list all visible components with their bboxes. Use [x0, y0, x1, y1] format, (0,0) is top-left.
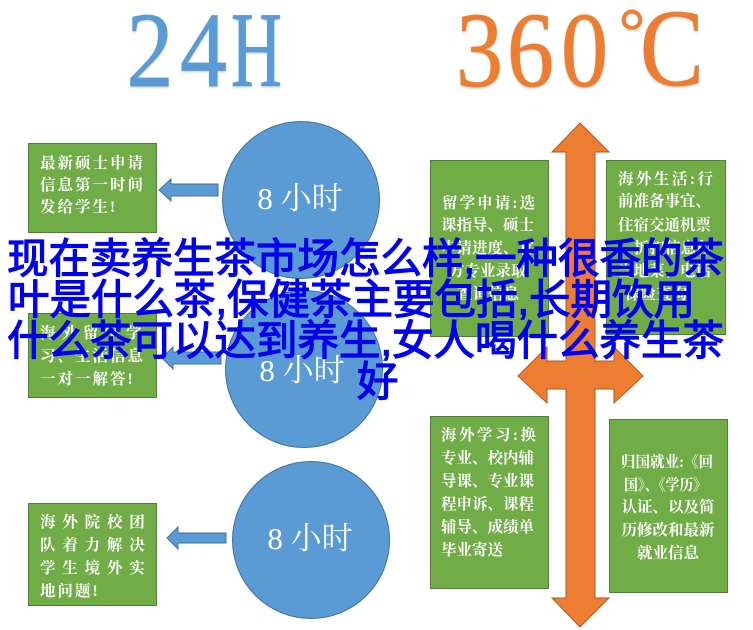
panel: top-left green box: 最新硕士申请: [40, 153, 145, 172]
circle: second 8 hours: 8 小时: [259, 353, 345, 388]
panel: middle-left green box: [28, 314, 156, 398]
panel: study application box: 课指导、硕士: [441, 215, 534, 234]
panel: overseas study box: [430, 416, 548, 588]
icon: arrow from middle circle: [162, 347, 221, 369]
panel: bottom-left green box: 地问题!: [40, 581, 100, 600]
circle: first 8 hours: 8 小时: [257, 181, 343, 216]
panel: overseas study box: 程申诉、课程: [441, 494, 535, 513]
panel: return employment box: 历修改和最新: [621, 521, 715, 539]
panel: study application box: [430, 160, 548, 336]
panel: study application box: 留学申请:选: [442, 193, 535, 212]
panel: bottom-left green box: 海外院校团: [40, 512, 152, 531]
panel: top-left green box: 发给学生!: [40, 197, 117, 216]
heading: 24H: [126, 0, 282, 110]
panel: middle-left green box: 海外留学学: [40, 323, 148, 342]
panel: overseas study box: 海外学习:换: [441, 425, 536, 444]
panel: overseas life box: [606, 160, 726, 334]
panel: overseas life box: 前准备事宜、: [618, 191, 711, 210]
panel: bottom-left green box: [28, 504, 156, 606]
panel: top-left green box: [28, 144, 156, 232]
heading: 360°C: [456, 0, 704, 110]
panel: overseas life box: 保险查询: [625, 284, 688, 303]
overlay headline text: [7, 235, 724, 405]
overlay headline text: 什么茶可以达到养生,女人喝什么养生茶: [7, 317, 724, 364]
panel: return employment box: 归国就业:《回: [621, 452, 713, 471]
circle: first 8 hours: [222, 122, 380, 278]
panel: bottom-left green box: 学生境外实: [40, 559, 152, 577]
icon: orange four-way arrow: [518, 123, 643, 627]
panel: overseas life box: 住宿交通机票: [618, 215, 712, 234]
overlay headline text: 好: [357, 358, 399, 405]
panel: overseas study box: 毕业寄送: [441, 540, 504, 559]
panel: return employment box: 国》、《学历》: [624, 476, 707, 494]
panel: top-left green box: 信息第一时间: [40, 175, 145, 194]
panel: overseas study box: 导课、专业课: [441, 471, 535, 490]
circle: second 8 hours: [226, 290, 382, 448]
icon: arrow from bottom circle: [167, 527, 226, 549]
panel: middle-left green box: 习、生活信息: [40, 346, 145, 365]
panel: return employment box: [610, 420, 728, 592]
overlay headline text: 现在卖养生茶市场怎么样,一种很香的茶: [7, 235, 724, 282]
overlay headline text: 叶是什么茶,保健茶主要包括,长期饮用: [8, 276, 695, 323]
panel: overseas life box: 折扣信息和: [634, 238, 712, 257]
panel: study application box: 申请进度、官: [441, 238, 535, 257]
panel: study application box: 查询信息: [457, 284, 521, 303]
icon: arrow from top circle: [159, 179, 218, 201]
circle: third 8 hours: 8 小时: [267, 521, 353, 556]
circle: third 8 hours: [232, 462, 390, 618]
panel: middle-left green box: 一对一解答!: [40, 370, 135, 388]
panel: return employment box: 就业信息: [637, 543, 700, 562]
panel: overseas study box: 辅导、成绩单: [441, 517, 535, 536]
panel: return employment box: 认证、以及简: [621, 497, 715, 516]
panel: study application box: 方专业录取: [449, 261, 527, 280]
panel: overseas study box: 专业、校内辅: [441, 448, 535, 467]
panel: overseas life box: 海外生活:行: [618, 169, 713, 188]
panel: overseas life box: 当地菜、电话: [618, 261, 712, 280]
panel: bottom-left green box: 队着力解决: [40, 535, 152, 554]
